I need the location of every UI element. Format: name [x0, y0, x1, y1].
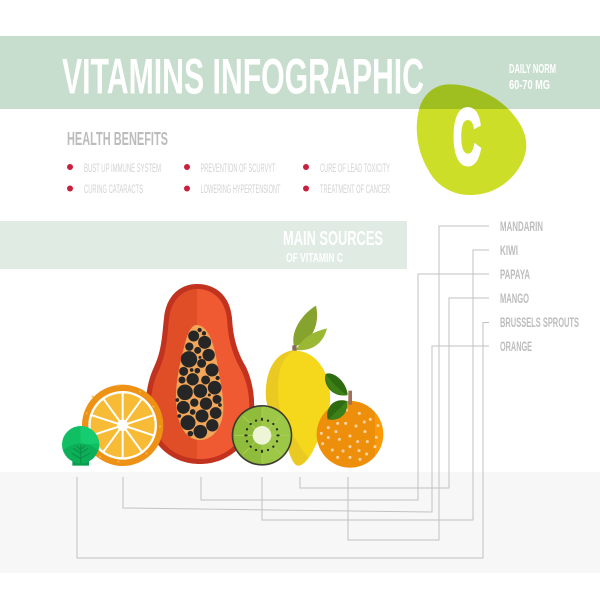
kiwi [232, 405, 292, 466]
health benefits list: TREATMENT OF CANCER [320, 184, 390, 196]
mandarin stem and leaves [325, 373, 352, 420]
mango leaves [293, 306, 327, 350]
papaya seeds [176, 328, 221, 438]
health benefits list [67, 163, 390, 196]
health benefits list: CURING CATARACTS [84, 184, 143, 196]
vitamin C badge [417, 84, 526, 195]
main sources band [0, 221, 407, 269]
daily norm text: 60-70 MG [509, 77, 550, 92]
badge blob [417, 84, 526, 195]
daily norm text [509, 61, 556, 92]
main sources band: MAIN SOURCES [283, 228, 383, 250]
mandarin [317, 373, 383, 468]
mango [266, 306, 330, 466]
source labels: ORANGE [500, 339, 532, 354]
vitamin C badge: C [453, 92, 481, 180]
papaya seed cavity [176, 325, 223, 440]
health benefits list: PREVENTION OF SCURVYT [200, 163, 276, 175]
health benefits list: LOWERING HYPERTENSIONT [200, 184, 280, 196]
header banner [0, 36, 600, 109]
bottom band [0, 472, 600, 573]
source labels: PAPAYA [500, 267, 530, 282]
source labels: MANDARIN [500, 219, 543, 234]
benefit bullets [67, 164, 309, 192]
source labels [500, 219, 579, 354]
daily norm text: DAILY NORM [509, 61, 556, 76]
source labels: MANGO [500, 291, 529, 306]
mandarin peel dots [320, 408, 379, 461]
brussels sprout [62, 426, 99, 466]
text: CURE OF LEAD TOXICITY [320, 163, 390, 175]
papaya [146, 284, 254, 464]
source labels: KIWI [500, 243, 518, 258]
orange slice [82, 384, 163, 466]
mandarin body [317, 401, 383, 468]
health benefits list: BUST UP IMMUNE SYSTEM [84, 163, 161, 175]
connector lines [77, 226, 489, 558]
health benefits heading: HEALTH BENEFITS [67, 128, 168, 149]
main sources band: OF VITAMIN C [286, 250, 343, 265]
badge overlap with banner [419, 84, 508, 109]
